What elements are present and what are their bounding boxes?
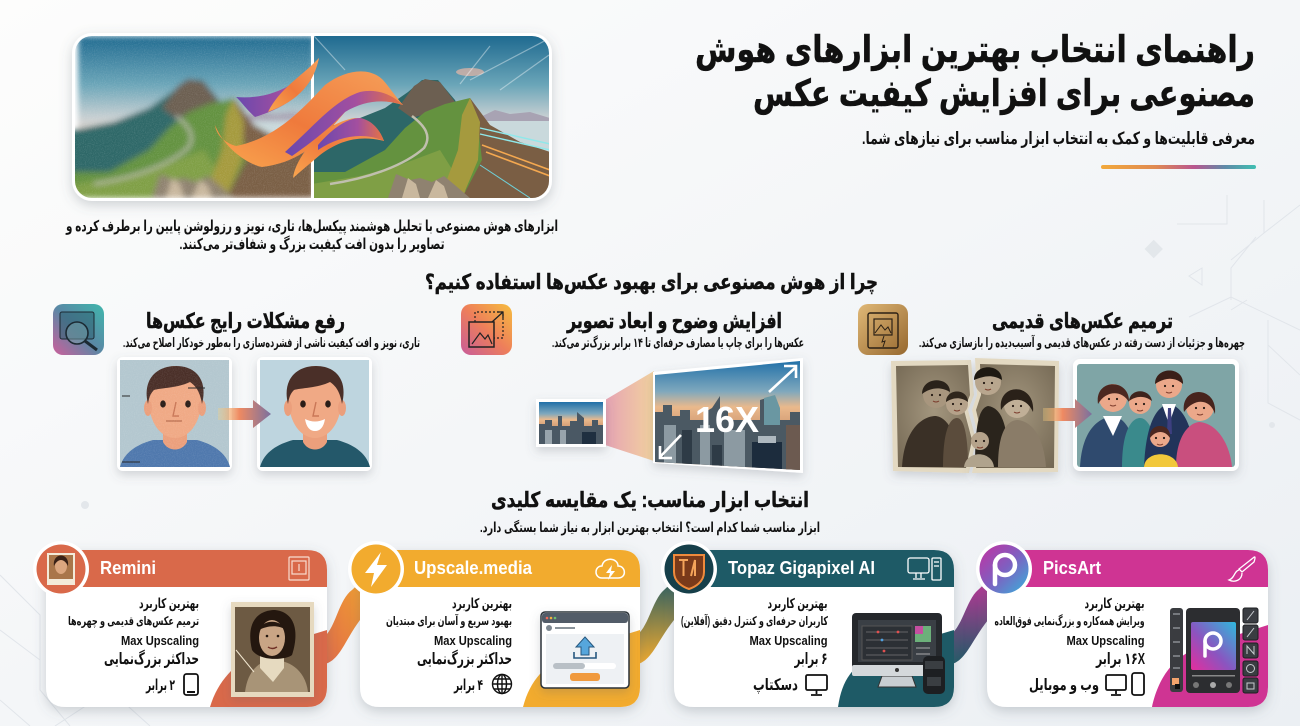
details: Max Upscaling (750, 634, 828, 648)
tool name: Remini (100, 558, 156, 578)
description: عکس‌ها را برای چاپ یا مصارف حرفه‌ای تا ۱۴ برابر بزرگ‌تر می‌کند. (552, 334, 804, 350)
arrow (218, 400, 271, 428)
card: PicsArt (976, 541, 1268, 707)
icon: colour brush swoosh (215, 58, 403, 178)
hero image: before and after (64, 33, 552, 201)
section heading: choosing a tool: انتخاب ابزار مناسب: یک مقایسه کلیدی (491, 489, 809, 512)
details: ویرایش همه‌کاره و بزرگ‌نمایی فوق‌العاده (994, 613, 1144, 629)
icon: globe (492, 674, 512, 694)
details: حداکثر بزرگ‌نمایی (104, 649, 199, 668)
arrow (1043, 399, 1092, 428)
tool name: PicsArt (1043, 558, 1101, 578)
details: بهترین کاربرد (1084, 596, 1144, 611)
card: Topaz Gigapixel AI (661, 541, 954, 707)
tool name: Topaz Gigapixel AI (728, 558, 875, 578)
photo: damaged family (891, 358, 1059, 473)
icon: desktop and phone (1106, 673, 1144, 695)
details: بهترین کاربرد (452, 596, 512, 611)
tool name: Upscale.media (414, 558, 533, 578)
details (994, 596, 1145, 694)
icon: desktop (806, 675, 827, 695)
details (681, 596, 828, 695)
details (68, 596, 199, 694)
details: وب و موبایل (1029, 677, 1099, 694)
photo: small city (536, 399, 606, 447)
details: بهبود سریع و آسان برای مبتدیان (386, 613, 512, 629)
heading: افزایش وضوح و ابعاد تصویر (566, 310, 782, 333)
photo: large city with 16X (653, 358, 803, 473)
hero caption (65, 218, 558, 253)
icon: phone (184, 674, 198, 695)
connector ribbon: Remini to Upscale (322, 575, 368, 664)
tool logo (661, 541, 717, 597)
panel: fix common problems (53, 304, 420, 471)
cone between images (605, 371, 654, 461)
details: ۱۶X برابر (1095, 651, 1145, 668)
details: Max Upscaling (434, 634, 512, 648)
photo: noisy portrait (117, 357, 232, 471)
details: ترمیم عکس‌های قدیمی و چهره‌ها (68, 614, 199, 629)
details: ۴ برابر (453, 677, 483, 694)
card: Upscale.media (348, 541, 640, 707)
tool logo (33, 541, 89, 597)
arrows (660, 366, 796, 458)
details: Max Upscaling (1066, 634, 1144, 648)
title accent bar (1101, 165, 1256, 169)
image: upload window (541, 612, 629, 688)
details: بهترین کاربرد (139, 596, 199, 611)
header icon (289, 557, 309, 580)
heading: ترمیم عکس‌های قدیمی (992, 310, 1173, 333)
details: Max Upscaling (121, 634, 199, 648)
details: دسکتاپ (753, 677, 798, 695)
details: کاربران حرفه‌ای و کنترل دقیق (آفلاین) (681, 613, 828, 629)
header icon (596, 559, 624, 580)
header icon (1229, 557, 1255, 581)
panel: increase sharpness and size (461, 304, 804, 473)
16X label: 16X (695, 399, 759, 440)
image: PicsArt editor (1170, 608, 1258, 693)
photo: restored family (1073, 359, 1239, 471)
description: تاری، نویز و افت کیفیت ناشی از فشرده‌سازی را به‌طور خودکار اصلاح می‌کند. (123, 335, 420, 350)
section heading: why AI: چرا از هوش مصنوعی برای بهبود عکس‌ها استفاده کنیم؟ (425, 271, 878, 294)
connector ribbon: Topaz to PicsArt (948, 575, 994, 664)
panel: restore old photos (858, 304, 1245, 473)
hero caption: تصاویر را بدون افت کیفیت بزرگ و شفاف‌تر می‌کنند. (180, 235, 444, 253)
title (695, 29, 1255, 115)
image: monitor and camera (852, 613, 945, 694)
card: Remini (33, 541, 327, 707)
section subheading: ابزار مناسب شما کدام است؟ انتخاب بهترین ابزار به نیاز شما بستگی دارد. (480, 519, 820, 536)
photo: restored portrait (257, 357, 372, 471)
tool logo (976, 541, 1032, 597)
icon: enlarge image (461, 304, 512, 355)
details: حداکثر بزرگ‌نمایی (417, 649, 512, 668)
icon: magnifier over noise (53, 304, 104, 355)
details: ۶ برابر (794, 651, 828, 668)
heading: رفع مشکلات رایج عکس‌ها (146, 310, 345, 333)
details (386, 596, 512, 694)
connector ribbon: Upscale to Topaz (635, 575, 680, 664)
header icon (908, 558, 941, 580)
image: vintage portrait (231, 602, 314, 697)
hero caption: ابزارهای هوش مصنوعی با تحلیل هوشمند پیکسل‌ها، تاری، نویز و رزولوشن پایین را برطرف کرده و (65, 218, 558, 236)
icon: photo album (858, 304, 908, 355)
details: بهترین کاربرد (768, 596, 828, 611)
tool logo (348, 541, 404, 597)
details: ۲ برابر (145, 677, 175, 694)
